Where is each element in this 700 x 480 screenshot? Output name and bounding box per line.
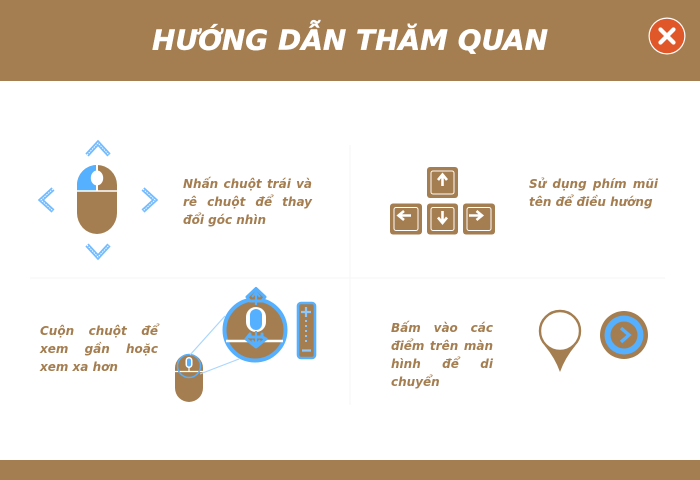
key left bbox=[390, 204, 422, 234]
small mouse bbox=[175, 354, 203, 402]
zoom scale bar bbox=[298, 303, 315, 358]
text: scroll to zoom: xem gần hoặc bbox=[40, 342, 158, 356]
key up bbox=[427, 167, 458, 198]
close button bbox=[648, 18, 686, 54]
title: HƯỚNG DẪN THĂM QUAN bbox=[152, 18, 548, 56]
icon: mouse with direction arrows bbox=[41, 143, 155, 257]
text: left click and drag: đổi góc nhìn bbox=[183, 213, 266, 227]
icon: location pin bbox=[540, 311, 580, 372]
text: click points to move: hình để di bbox=[391, 357, 493, 371]
text: click points to move: điểm trên màn bbox=[391, 339, 493, 353]
text: arrow keys: tên để điều hướng bbox=[529, 195, 653, 209]
text: click points to move: Bấm vào các bbox=[391, 321, 493, 335]
zoom lines bbox=[190, 316, 239, 374]
mouse body bbox=[77, 165, 117, 234]
text: click points to move: chuyển bbox=[391, 375, 440, 389]
text: arrow keys: Sử dụng phím mũi bbox=[529, 177, 658, 191]
text: left click and drag: Nhấn chuột trái và bbox=[183, 177, 312, 191]
text: scroll to zoom: Cuộn chuột để bbox=[40, 324, 158, 338]
icon: arrow keys bbox=[390, 167, 495, 234]
footer band bbox=[0, 460, 700, 480]
icon: scroll wheel mouse bbox=[175, 288, 315, 402]
text: click points to move bbox=[391, 320, 494, 389]
text: left click and drag: rê chuột để thay bbox=[183, 195, 312, 209]
header band bbox=[0, 0, 700, 81]
text: left click and drag bbox=[183, 176, 312, 227]
text: arrow keys bbox=[529, 177, 658, 209]
magnified wheel bbox=[224, 288, 286, 360]
key right bbox=[463, 204, 495, 234]
text: scroll to zoom bbox=[40, 324, 160, 374]
direction arrows bbox=[41, 143, 155, 257]
key down bbox=[427, 204, 458, 234]
text: scroll to zoom: xem xa hơn bbox=[40, 360, 118, 374]
icon: next button bbox=[600, 311, 648, 359]
